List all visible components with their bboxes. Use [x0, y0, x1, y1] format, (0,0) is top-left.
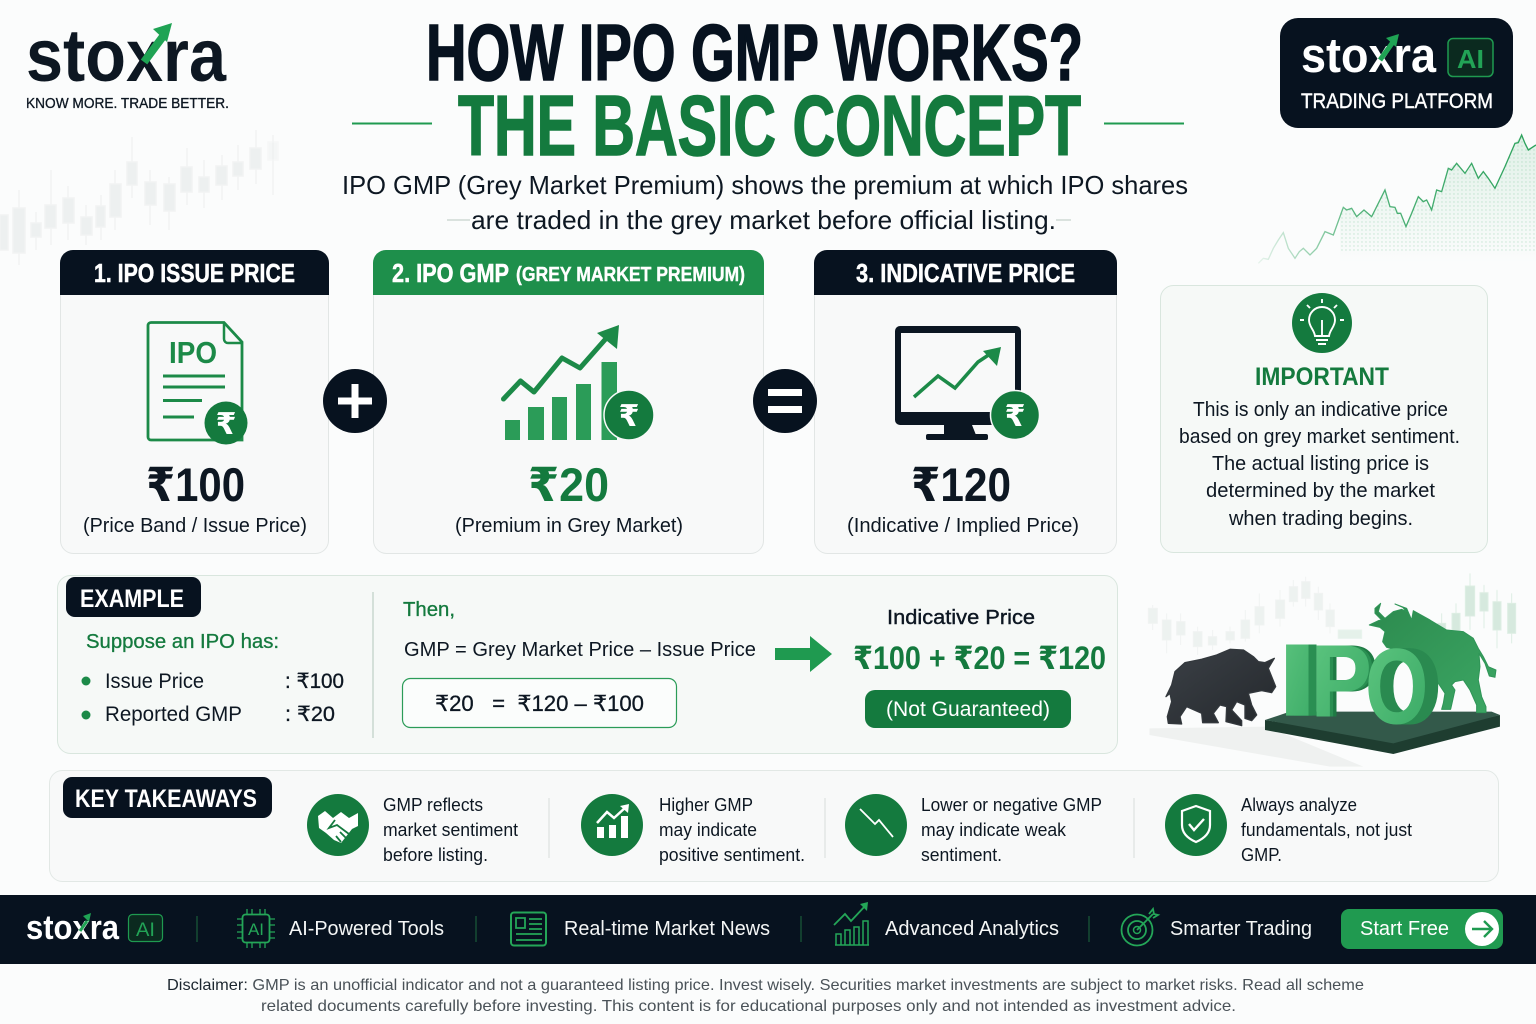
intro text: are traded in the grey market before official listing.	[471, 205, 1056, 235]
IPO letter O: O	[1372, 626, 1435, 746]
takeaway: higher GMP: positive sentiment.	[659, 844, 805, 865]
result: (Not Guaranteed)	[886, 698, 1050, 721]
logo: stoxra: KNOW MORE. TRADE BETTER.	[26, 96, 229, 112]
header: GMP: 2. IPO GMP	[392, 260, 509, 288]
footer item: target	[1122, 909, 1312, 946]
panel: key takeaways	[50, 770, 1498, 882]
header: indicative price: 3. INDICATIVE PRICE	[856, 260, 1075, 288]
footer bar	[0, 895, 1536, 964]
IPO letter I: I	[1276, 622, 1319, 738]
takeaway: market sentiment: before listing.	[383, 844, 488, 865]
title: THE BASIC CONCEPT	[458, 79, 1081, 174]
logo: stoxra: stoxra	[26, 14, 227, 97]
panel: indicative price	[814, 250, 1117, 554]
badge: key takeaways	[63, 777, 272, 818]
badge: AI trading platform: TRADING PLATFORM	[1301, 90, 1493, 113]
button: start free: Start Free	[1360, 917, 1449, 940]
badge: key takeaways: KEY TAKEAWAYS	[75, 785, 257, 813]
example inputs: : ₹100	[285, 670, 344, 693]
footer item: AI tools: AI	[248, 920, 264, 939]
important body text: when trading begins.	[1228, 508, 1413, 530]
important body text	[1179, 399, 1460, 530]
IPO letter I	[1276, 622, 1327, 738]
example inputs: Issue Price	[105, 670, 204, 693]
badge: AI trading platform: AI	[1457, 44, 1484, 74]
panel: example	[58, 576, 1118, 754]
button: start free	[1341, 909, 1503, 949]
IPO letter O: O	[1378, 626, 1442, 746]
background candlesticks	[0, 130, 278, 265]
takeaway: fundamentals: Always analyze	[1241, 794, 1357, 815]
takeaway: fundamentals: GMP.	[1241, 844, 1282, 865]
footer item: analytics: Advanced Analytics	[885, 917, 1059, 940]
title: HOW IPO GMP WORKS?	[426, 8, 1083, 97]
icon: rising bars with rupee	[504, 325, 654, 440]
formula	[402, 599, 756, 728]
example inputs: Suppose an IPO has:	[86, 631, 279, 653]
footer item: AI tools	[237, 909, 444, 948]
disclaimer	[167, 977, 1364, 1015]
result	[853, 606, 1106, 728]
formula: GMP = Grey Market Price – Issue Price	[404, 638, 756, 661]
header: issue price: 1. IPO ISSUE PRICE	[94, 260, 295, 288]
takeaway: fundamentals: fundamentals, not just	[1241, 819, 1412, 840]
IPO letter O: O	[1368, 626, 1432, 746]
IPO letter P: P	[1317, 623, 1379, 739]
disclaimer: related documents carefully before investing. This content is for educational purposes only and not intended as investment advice.	[261, 998, 1236, 1015]
IPO letter P: P	[1310, 623, 1372, 739]
takeaway: lower GMP	[845, 794, 1102, 865]
result: ₹100 + ₹20 = ₹120	[853, 640, 1106, 676]
icon: IPO document with rupee: ₹	[216, 408, 236, 441]
caption: implied price: (Indicative / Implied Price)	[847, 515, 1079, 537]
badge: AI trading platform	[1280, 18, 1513, 128]
value: 120 rupees: ₹120	[911, 458, 1011, 511]
background growth line chart	[1258, 135, 1536, 263]
icon: IPO document with rupee	[148, 322, 248, 444]
heading: important: IMPORTANT	[1255, 363, 1389, 391]
badge: example: EXAMPLE	[80, 585, 184, 613]
result: Indicative Price	[887, 606, 1035, 629]
formula: ₹20 = ₹120 – ₹100	[435, 691, 644, 716]
header: issue price	[60, 250, 329, 295]
footer item: market news	[511, 912, 770, 946]
takeaway: higher GMP	[581, 794, 805, 865]
footer item: target: Smarter Trading	[1170, 917, 1312, 940]
takeaway: lower GMP: may indicate weak	[921, 819, 1067, 840]
badge: example	[66, 577, 201, 617]
takeaway: lower GMP: sentiment.	[921, 844, 1002, 865]
important body text: The actual listing price is	[1212, 453, 1429, 475]
icon: monitor with chart	[895, 326, 1040, 440]
important body text: based on grey market sentiment.	[1179, 426, 1460, 448]
takeaway: higher GMP: may indicate	[659, 819, 757, 840]
value: 20 rupees: ₹20	[528, 458, 609, 511]
panel: IPO issue price	[60, 250, 329, 554]
footer item: AI tools: AI-Powered Tools	[289, 917, 444, 940]
panel: important note	[1160, 286, 1488, 552]
takeaway: market sentiment: GMP reflects	[383, 794, 483, 815]
disclaimer: Disclaimer: GMP is an unofficial indicator and not a guaranteed listing price. Invest wisely. Securities market investments are subject to market risks. Read all scheme	[167, 977, 1364, 994]
IPO letter P: P	[1314, 623, 1375, 739]
example inputs: Reported GMP	[105, 703, 242, 726]
example inputs	[82, 631, 344, 726]
IPO letter I: I	[1280, 622, 1323, 738]
IPO letter I: I	[1284, 622, 1327, 738]
icon: IPO document with rupee: IPO	[169, 335, 217, 370]
IPO letter O: O	[1375, 626, 1438, 746]
important body text: This is only an indicative price	[1193, 399, 1448, 421]
takeaway: lower GMP: Lower or negative GMP	[921, 794, 1102, 815]
takeaway: market sentiment: market sentiment	[383, 819, 518, 840]
example inputs: : ₹20	[285, 703, 335, 726]
bear	[1166, 649, 1276, 726]
icon: monitor with chart: ₹	[1005, 400, 1025, 433]
intro text	[342, 170, 1188, 235]
value: 100 rupees: ₹100	[146, 458, 245, 511]
illustration: bear, bull and IPO	[1148, 573, 1516, 767]
caption: price band: (Price Band / Issue Price)	[83, 515, 307, 537]
title	[352, 8, 1184, 174]
icon: light bulb	[1292, 293, 1352, 353]
footer logo: stoxra	[26, 909, 120, 947]
badge: AI trading platform: stoxra	[1301, 29, 1437, 83]
header: GMP: (GREY MARKET PREMIUM)	[516, 263, 745, 286]
IPO letter O: O	[1365, 626, 1428, 746]
header: GMP	[373, 250, 764, 295]
caption: premium: (Premium in Grey Market)	[455, 515, 683, 537]
footer logo: AI	[136, 920, 155, 941]
icon: plus operator	[323, 369, 387, 433]
takeaway: fundamentals	[1165, 794, 1412, 865]
takeaway: market sentiment	[307, 794, 518, 865]
icon: equals operator	[753, 369, 817, 433]
takeaway: higher GMP: Higher GMP	[659, 794, 753, 815]
intro text: IPO GMP (Grey Market Premium) shows the premium at which IPO shares	[342, 170, 1188, 200]
bull	[1369, 603, 1496, 713]
arrow	[775, 636, 832, 672]
icon: rising bars with rupee: ₹	[619, 400, 639, 433]
header: indicative price	[814, 250, 1117, 295]
important body text: determined by the market	[1206, 480, 1435, 502]
formula: Then,	[403, 599, 455, 621]
footer item: analytics	[834, 902, 1059, 945]
panel: IPO GMP	[373, 250, 764, 554]
footer item: market news: Real-time Market News	[564, 917, 770, 940]
